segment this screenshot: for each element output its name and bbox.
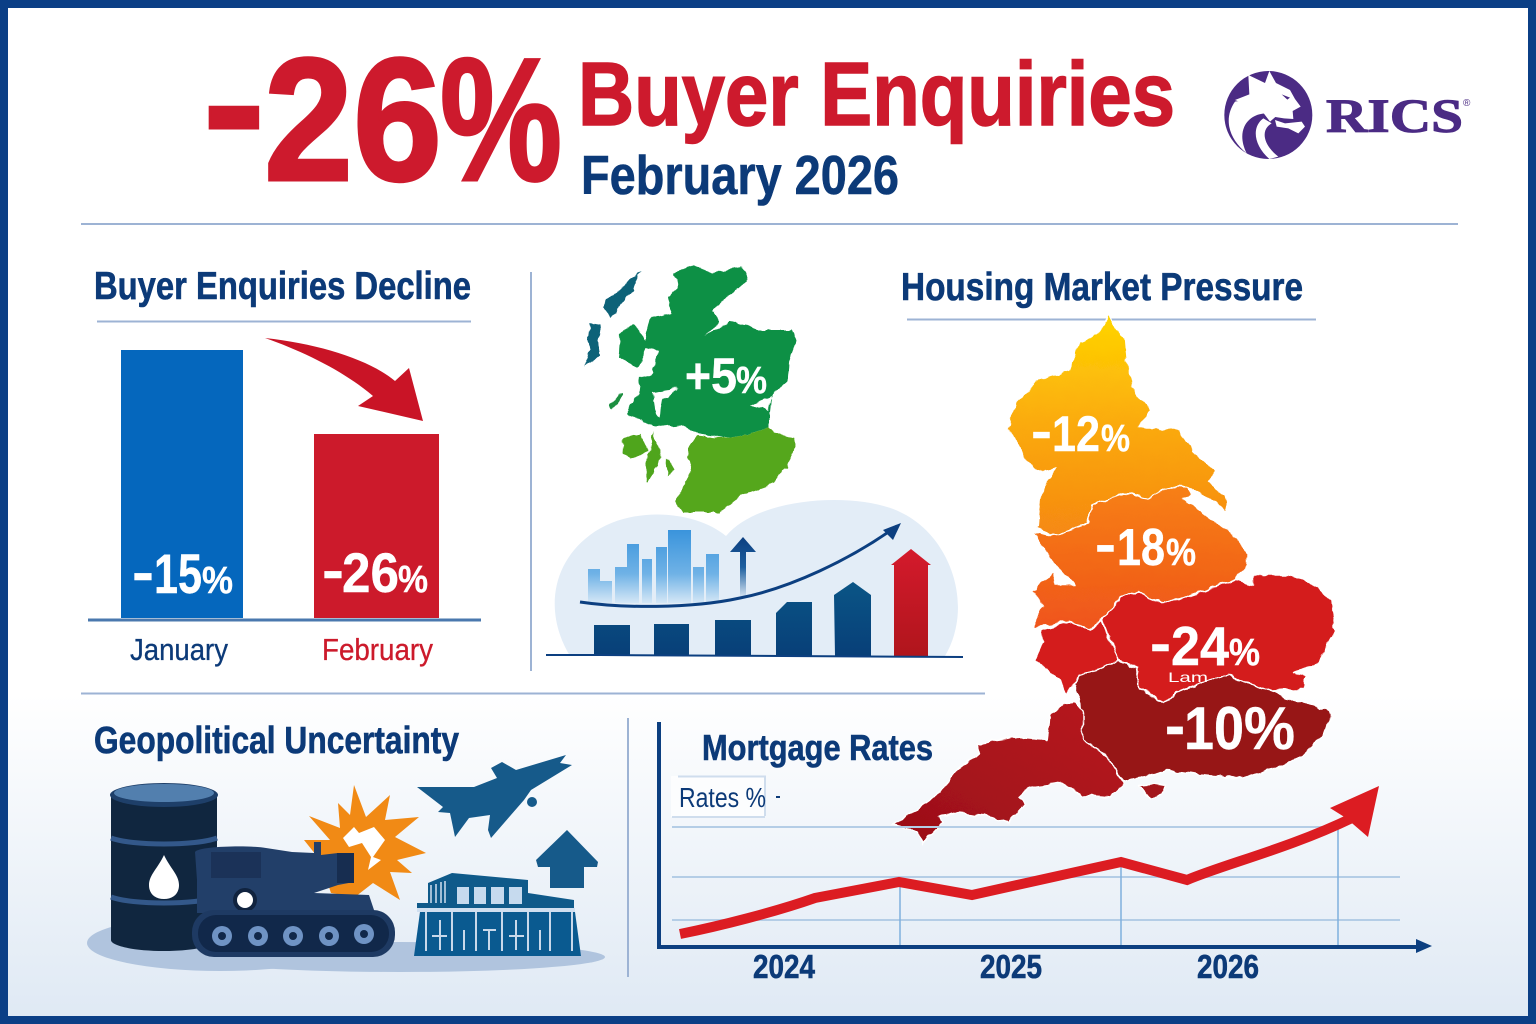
icon: tank: [192, 842, 395, 957]
arrow head: [1330, 786, 1379, 837]
Mull: [610, 392, 622, 410]
value: East: -: [1150, 612, 1171, 674]
value: %: [736, 360, 767, 402]
map: Scotland: [583, 265, 797, 512]
panel: buyer enquiries decline: [88, 265, 481, 667]
red bar: [891, 549, 931, 656]
panel: geopolitical uncertainty: [87, 720, 605, 972]
city bars: [588, 530, 719, 603]
value: Midlands: -: [1095, 516, 1116, 574]
value: South East: 10: [1184, 695, 1244, 762]
Isle of Wight: [1140, 783, 1165, 799]
value: East: %: [1229, 632, 1260, 674]
title: -26% Buyer Enquiries: -: [203, 6, 265, 201]
rising bars: [594, 582, 871, 656]
bar: January: 15: [154, 542, 202, 605]
panel: mortgage rates chart: [659, 722, 1432, 985]
backdrop: [555, 500, 958, 656]
axis line: [88, 618, 481, 622]
grid lines: [672, 827, 1400, 920]
map: England regions: [893, 315, 1335, 844]
heading: Mortgage Rates: [702, 727, 933, 768]
year: 2024: 2024: [753, 948, 816, 985]
year: 2026: 2026: [1197, 948, 1259, 985]
value: South East: %: [1244, 695, 1295, 762]
bar: January: %: [202, 560, 233, 602]
title: -26% Buyer Enquiries: %: [440, 23, 562, 218]
icon: up arrow house: [536, 830, 598, 888]
baseline: [546, 655, 963, 657]
value: North: %: [1101, 418, 1130, 460]
region: South East: [1073, 660, 1332, 782]
region: North: [1008, 315, 1227, 536]
trend arrow head: [883, 523, 901, 540]
bar: January: [121, 350, 243, 618]
trend line: rates rising: [680, 818, 1352, 934]
title: -26% Buyer Enquiries: Buyer Enquiries: [578, 45, 1175, 145]
bar: February: [314, 434, 439, 618]
label: February: February: [322, 632, 433, 667]
icon: explosion: [304, 785, 426, 900]
logo: RICS: RICS: [1326, 90, 1463, 143]
panel: housing market pressure: [893, 266, 1335, 844]
Southern Scotland: [675, 427, 795, 512]
label: London: Lam: [1168, 669, 1208, 685]
title: -26% Buyer Enquiries: February 2026: [581, 144, 899, 206]
region: South West: [893, 701, 1123, 844]
axis label box: Rates %: [679, 782, 766, 813]
heading: Housing Market Pressure: [901, 266, 1303, 309]
value: 5: [711, 348, 737, 404]
firths: [653, 312, 772, 417]
icon: building: [414, 873, 581, 956]
Outer Hebrides: [583, 271, 640, 368]
heading: Geopolitical Uncertainty: [94, 720, 459, 762]
axis label box: [671, 776, 780, 817]
heading: Buyer Enquiries Decline: [94, 265, 471, 308]
icon: oil barrel: [110, 783, 218, 951]
chart: growth illustration: [546, 500, 963, 657]
value: East: 24: [1171, 615, 1229, 677]
bar: February: %: [398, 559, 428, 601]
region: East: [1103, 575, 1335, 704]
region: West Midlands: [1035, 620, 1118, 696]
bar: January: -: [132, 540, 154, 603]
title: -26% Buyer Enquiries: [203, 6, 1175, 218]
value: Midlands: %: [1166, 532, 1196, 574]
value: Midlands: 18: [1117, 519, 1165, 577]
year: 2025: 2025: [980, 948, 1042, 985]
value: South East: -: [1165, 692, 1185, 759]
title: -26% Buyer Enquiries: 26: [264, 23, 442, 218]
trend curve: [580, 526, 897, 606]
icon: jet: [417, 755, 572, 838]
value: North: 12: [1052, 406, 1100, 462]
axes: [659, 722, 1422, 947]
arrow: decline: [265, 338, 423, 421]
Kintyre and islands: [622, 432, 675, 482]
value: North: -: [1031, 403, 1052, 459]
region: Midlands: [1032, 486, 1248, 630]
bar: February: 26: [342, 541, 399, 604]
label: January: January: [130, 632, 228, 667]
logo: RICS: ®: [1463, 98, 1471, 109]
Highlands: [618, 265, 797, 439]
ground shadow: [87, 915, 605, 972]
up arrow: [730, 537, 756, 597]
value: +: [685, 348, 711, 404]
logo: RICS: [1224, 71, 1471, 159]
dividers: [81, 224, 1458, 977]
bar: February: -: [322, 538, 344, 601]
